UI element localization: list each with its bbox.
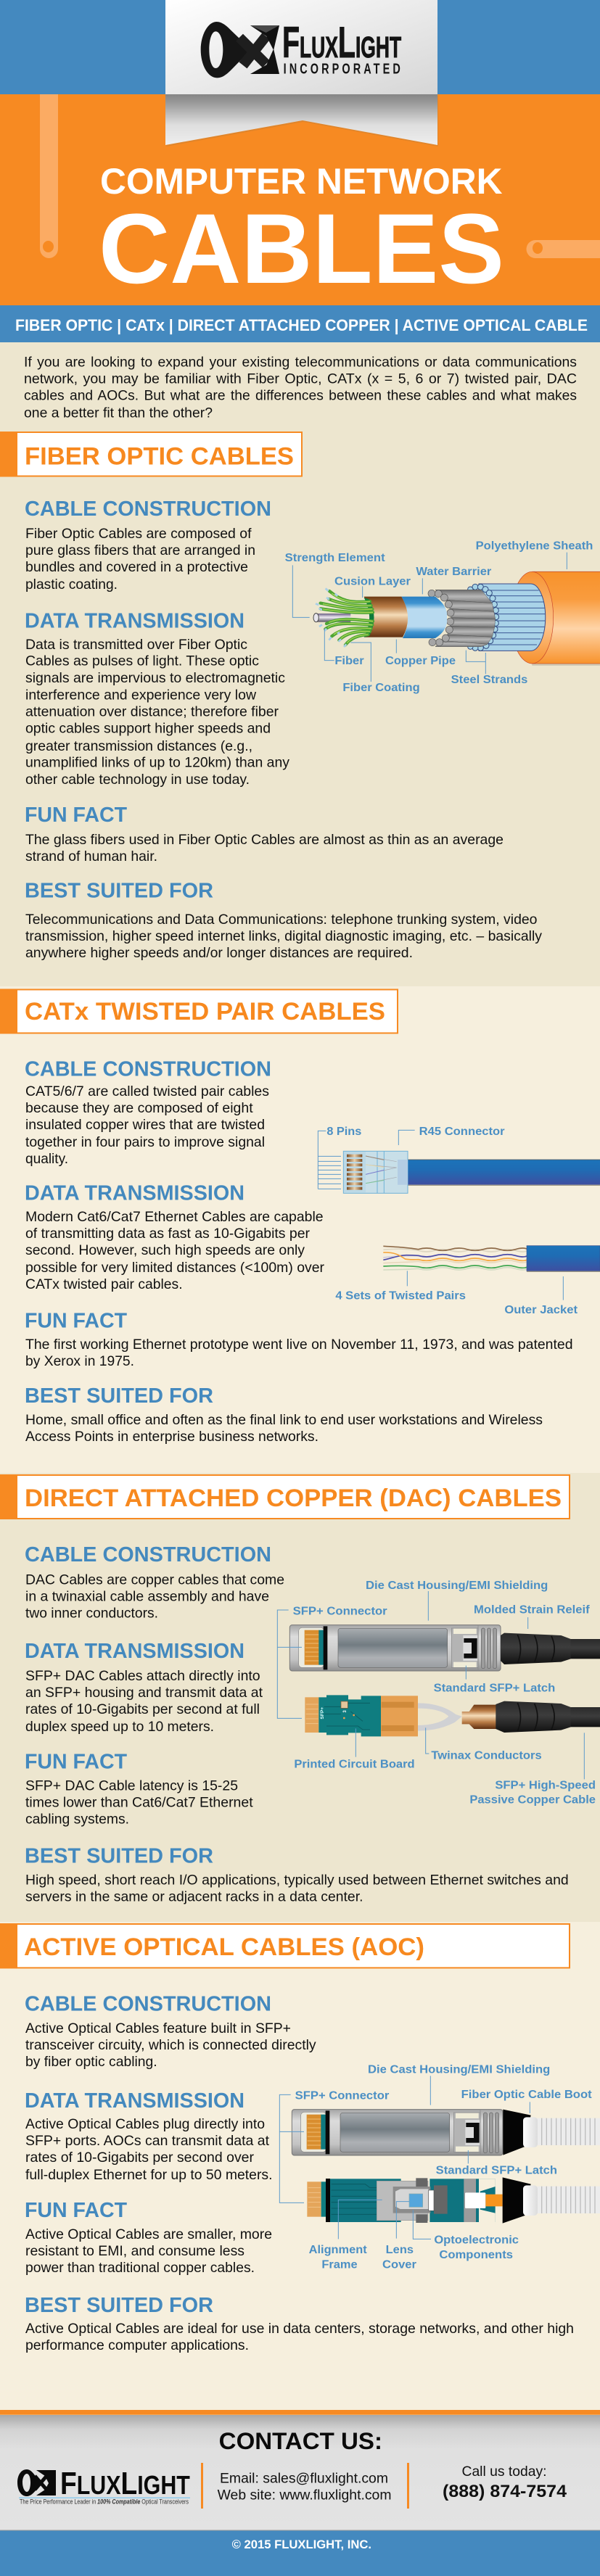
text block: data transmission: SFP+ ports. AOCs can transmit data at [25,2133,270,2149]
leader lines [277,1591,584,1779]
labels: SFP+ Connector [293,1606,387,1618]
labels: Alignment [309,2244,367,2256]
text block: data transmission: signals are impervious to electromagnetic [25,670,285,686]
text block: cable construction: two inner conductors. [25,1605,158,1621]
footer logo [17,2465,190,2506]
heading: DAC [0,1474,570,1519]
text block: data transmission: SFP+ DAC Cables attach directly into [25,1668,260,1684]
labels: Standard SFP+ Latch [436,2165,557,2177]
text block: best suited for: servers in the same or adjacent racks in a data center. [25,1888,363,1904]
text block: data transmission: CATx twisted pair cables. [25,1276,183,1292]
SFP+ housing [289,1625,501,1671]
text block: fun fact: by Xerox in 1975. [25,1353,134,1369]
text block: fun fact [25,1310,572,1369]
text block: cable construction: pure glass fibers that are arranged in [25,542,255,558]
text block: cable construction: Fiber Optic Cables are composed of [25,526,252,542]
text block: data transmission: greater transmission distances (e.g., [25,738,252,754]
text block: data transmission: DATA TRANSMISSION [25,610,244,633]
text block: data transmission [25,610,289,788]
heading: contact us: CONTACT US: [219,2428,382,2454]
labels: Printed Circuit Board [294,1759,415,1771]
text block: data transmission: attenuation over distance; therefore fiber [25,703,279,719]
labels: SFP+ High-Speed [495,1780,596,1792]
heading: DAC: DIRECT ATTACHED COPPER (DAC) CABLES [25,1485,562,1512]
heading: fiber optic cables: FIBER OPTIC CABLES [25,442,294,470]
text block: cable construction: CABLE CONSTRUCTION [25,498,271,521]
labels: R45 Connector [419,1126,505,1138]
text block: data transmission: Cables as pulses of light. These optic [25,653,259,669]
labels: Lens [386,2244,414,2256]
diagram: fiber optic cable cross-section [285,540,600,694]
text block: fun fact: Active Optical Cables are smaller, more [25,2226,272,2242]
text block: data transmission: interference and experience very low [25,688,257,703]
labels: Twinax Conductors [431,1750,542,1762]
text block: fun fact: resistant to EMI, and consume less [25,2243,244,2259]
text block: cable construction: plastic coating. [25,577,118,593]
labels: Water Barrier [416,566,491,578]
orange title panel [0,94,600,305]
labels: Outer Jacket [504,1304,578,1316]
text block: best suited for [25,2294,574,2353]
text block: fun fact: The glass fibers used in Fiber Optic Cables are almost as thin as an average [25,832,504,848]
labels: Molded Strain Releif [474,1604,591,1617]
text block: fun fact [25,804,504,864]
logo: FluxLight Incorporated: INCORPORATED [284,60,403,77]
text block: best suited for [25,1384,543,1445]
diagram: AOC SFP+ module [279,2064,600,2271]
text block: best suited for: BEST SUITED FOR [25,879,213,902]
lower fiber boot [503,2177,600,2224]
text block: fun fact [25,1751,253,1828]
labels: Fiber Coating [342,682,420,694]
contact details [218,2471,392,2503]
text block: best suited for: Active Optical Cables are ideal for use in data centers, storage networks, and other high [25,2321,574,2337]
text block: data transmission: of transmitting data as fast as 10-Gigabits per [25,1226,311,1242]
text block: data transmission: DATA TRANSMISSION [25,1640,244,1663]
logo: FluxLight Incorporated: FLUXLIGHT [282,18,401,67]
top blue banner [0,0,600,94]
text block: cable construction: transceiver circuity, which is connected directly [25,2037,316,2053]
text block: cable construction: bundles and covered in a protective [25,559,248,575]
labels: Passive Copper Cable [469,1794,596,1807]
labels: 4 Sets of Twisted Pairs [335,1290,466,1303]
text block: best suited for: High speed, short reach I/O applications, typically used between Ethernet switches and [25,1873,569,1888]
intro text: network, you may be familiar with Fiber Optic, CATx (x = 5, 6 or 7) twisted pair, DAC [24,371,577,387]
intro text: one a better fit than the other? [24,405,213,421]
title: COMPUTER NETWORK [100,161,502,202]
text block: cable construction: by fiber optic cabling. [25,2054,157,2070]
text block: cable construction: quality. [25,1151,68,1167]
labels [285,540,593,694]
text block: data transmission: Modern Cat6/Cat7 Ethernet Cables are capable [25,1209,324,1225]
panel: direct attached copper cables [0,1474,600,1904]
text block: fun fact: strand of human hair. [25,849,157,864]
logo: FluxLight Incorporated [201,18,403,78]
text block: best suited for: Telecommunications and Data Communications: telephone trunking system, video [25,912,537,928]
phone: Call us today: [461,2464,547,2480]
phone [443,2464,567,2501]
text block: cable construction: CABLE CONSTRUCTION [25,1058,271,1081]
labels: SFP+ Connector [295,2090,389,2102]
text block: fun fact [25,2199,272,2276]
text block: fun fact: SFP+ DAC Cable latency is 15-25 [25,1778,238,1793]
labels: Cover [382,2258,416,2271]
text block: best suited for: transmission, higher speed internet links, digital diagnostic imaging, etc. – basically [25,928,542,944]
copper ferrule [462,1705,498,1729]
text block: cable construction [25,498,271,593]
text block: data transmission: unamplified links of up to 120km) than any [25,755,289,771]
cable type band [0,305,600,342]
labels: Die Cast Housing/EMI Shielding [368,2064,550,2076]
twisted pairs [383,1246,527,1270]
heading: AOC: ACTIVE OPTICAL CABLES (AOC) [24,1933,424,1961]
text block: best suited for [25,1844,569,1904]
labels: 8 Pins [326,1126,361,1138]
SFP+ housing [292,2110,503,2155]
text block: best suited for [25,879,542,961]
diagram: DAC SFP+ module [277,1580,600,1807]
labels [293,1580,596,1807]
text block: data transmission: full-duplex Ethernet for up to 50 meters. [25,2167,273,2183]
circuit board [305,1695,418,1736]
text block: data transmission: possible for very limited distances (<100m) over [25,1260,325,1276]
heading: CATx: CATx TWISTED PAIR CABLES [25,998,385,1025]
labels: Steel Strands [451,674,527,686]
contact details: Email: sales@fluxlight.com [220,2471,388,2487]
panel: fiber optic cables [0,432,600,961]
labels: Die Cast Housing/EMI Shielding [366,1580,548,1592]
heading: AOC [0,1923,570,1968]
active optical internals [307,2178,503,2223]
text block: fun fact: times lower than Cat6/Cat7 Ethernet [25,1795,253,1811]
panel: CATx twisted pair cables [0,989,600,1445]
phone: (888) 874-7574 [443,2482,567,2501]
labels: Copper Pipe [385,655,456,667]
panel: active optical cables [0,1923,600,2353]
text block: data transmission [25,1640,263,1735]
text block: data transmission [25,1182,325,1292]
text block: data transmission: rates of 10-Gigabits per second at full [25,1701,260,1717]
text block: data transmission: DATA TRANSMISSION [25,1182,244,1205]
footer: contact panel [0,2410,600,2530]
text block: cable construction [25,1543,284,1621]
text block: cable construction: because they are composed of eight [25,1100,253,1116]
contact details: Web site: www.fluxlight.com [218,2488,392,2503]
text block: data transmission: Active Optical Cables plug directly into [25,2116,265,2132]
labels: Components [439,2249,513,2261]
title: CABLES [99,194,504,305]
text block: best suited for: Home, small office and often as the final link to end user workstations and Wireless [25,1412,543,1428]
text block: best suited for: Access Points in enterprise business networks. [25,1429,319,1445]
leader lines [292,553,567,682]
text block: data transmission: other cable technology in use today. [25,772,250,788]
leader lines [279,2076,530,2239]
text block: fun fact: power than traditional copper cables. [25,2260,255,2276]
labels: Fiber Optic Cable Boot [461,2089,592,2101]
strain relief and cable [501,1633,600,1664]
intro text: If you are looking to expand your existing telecommunications or data communications [24,355,577,371]
intro text [24,355,577,421]
text block: data transmission: optic cables support higher speeds and [25,721,271,737]
text block: fun fact: FUN FACT [25,1751,127,1774]
text block: data transmission: duplex speed up to 10 meters. [25,1719,214,1735]
text block: data transmission: DATA TRANSMISSION [25,2089,244,2113]
text block: cable construction: together in four pairs to improve signal [25,1134,265,1150]
text block: data transmission: second. However, such high speeds are only [25,1242,305,1258]
text block: best suited for: performance computer applications. [25,2337,249,2353]
labels [326,1126,578,1316]
text block: cable construction: insulated copper wires that are twisted [25,1117,265,1133]
text block: best suited for: BEST SUITED FOR [25,1844,213,1867]
text block: cable construction [25,1993,316,2070]
heading: CATx [0,989,398,1034]
leader lines [318,1130,563,1300]
logo ribbon [165,0,438,146]
text block: cable construction: Active Optical Cables feature built in SFP+ [25,2020,291,2036]
text block: cable construction: CABLE CONSTRUCTION [25,1543,271,1566]
labels [295,2064,592,2271]
text block: fun fact: cabling systems. [25,1812,129,1828]
cable type band: FIBER OPTIC | CATx | DIRECT ATTACHED COPPER | ACTIVE OPTICAL CABLE [15,316,588,334]
footer logo: FLUXLIGHT [60,2465,190,2501]
text block: fun fact: FUN FACT [25,804,127,827]
text block: fun fact: FUN FACT [25,2199,127,2222]
text block: cable construction: CABLE CONSTRUCTION [25,1993,271,2016]
twinax conductors [418,1703,462,1731]
text block: data transmission [25,2089,273,2183]
footer logo: The Price Performance Leader in 100% Compatible Optical Transceivers [20,2498,189,2506]
labels: Strength Element [285,552,385,564]
text block: cable construction: CAT5/6/7 are called twisted pair cables [25,1083,269,1099]
footer: copyright band: © 2015 FLUXLIGHT, INC. [232,2538,371,2551]
text block: best suited for: anywhere higher speeds and/or longer distances are required. [25,945,413,961]
labels: Frame [321,2258,358,2271]
text block: best suited for: BEST SUITED FOR [25,2294,213,2317]
circuit board: SFP+ [320,1707,325,1720]
circuit board: 3 [343,1710,348,1713]
text block: cable construction: DAC Cables are copper cables that come [25,1572,284,1588]
text block: cable construction [25,1058,271,1167]
heading: fiber optic cables [0,432,302,477]
labels: Optoelectronic [434,2234,519,2247]
upper fiber boot [503,2110,600,2155]
text block: cable construction: in a twinaxial cable assembly and have [25,1589,269,1605]
labels: Polyethylene Sheath [476,540,593,552]
labels: Cusion Layer [334,575,411,587]
text block: data transmission: rates of 10-Gigabits per second over [25,2150,255,2166]
text block: data transmission: an SFP+ housing and transmit data at [25,1685,263,1701]
text block: best suited for: BEST SUITED FOR [25,1384,213,1408]
diagram: RJ45 connector and twisted pairs [318,1126,600,1316]
labels: Standard SFP+ Latch [434,1683,555,1695]
text block: data transmission: Data is transmitted over Fiber Optic [25,637,247,653]
text block: fun fact: The first working Ethernet prototype went live on November 11, 1973, and was patented [25,1337,572,1353]
footer: copyright band [0,2530,600,2576]
intro text: cables and AOCs. But what are the differences between these cables and what makes [24,388,577,404]
rear strain relief [496,1701,600,1733]
labels: Fiber [334,655,364,667]
text block: fun fact: FUN FACT [25,1310,127,1333]
